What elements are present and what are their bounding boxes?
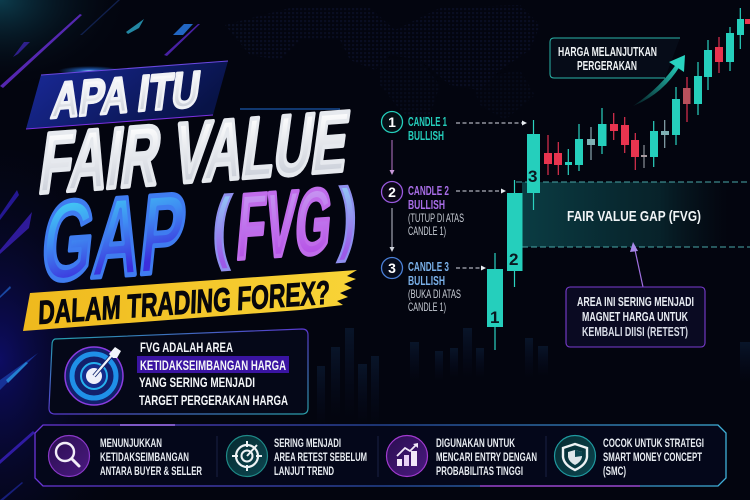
step 1: CANDLE 1 — [408, 115, 447, 129]
benefit 3 text: MENCARI ENTRY DENGAN — [436, 450, 537, 464]
fvg band — [516, 182, 750, 247]
candle numbers — [490, 167, 537, 327]
candle numbers: 3 — [528, 167, 537, 186]
title: fair value: FAIR VALUE — [34, 93, 355, 212]
benefit 1 text: KETIDAKSEIMBANGAN — [100, 450, 189, 464]
title: apa itu: APA ITU — [49, 60, 204, 129]
step 3: (BUKA DI ATAS — [408, 287, 461, 301]
world map dot texture — [225, 5, 540, 130]
step 2: BULLISH — [408, 198, 445, 212]
step 3: BULLISH — [408, 274, 445, 288]
title: dalam trading forex — [23, 270, 357, 332]
candle numbers: 2 — [509, 250, 518, 269]
definition text: TARGET PERGERAKAN HARGA — [139, 392, 288, 408]
step 3: CANDLE 1) — [408, 300, 446, 314]
decorative streaks — [0, 0, 200, 500]
icon: crosshair target — [226, 436, 268, 476]
icon: target with arrow — [65, 347, 123, 405]
fvg label: FAIR VALUE GAP (FVG) — [567, 208, 701, 225]
panel: definition — [49, 329, 308, 414]
callout: retest: MAGNET HARGA UNTUK — [582, 310, 688, 324]
definition text: FVG ADALAH AREA — [140, 339, 233, 355]
candle numbers: 1 — [490, 308, 499, 327]
arrow: step 1 to 2 — [390, 140, 394, 175]
callout: price continues: HARGA MELANJUTKAN — [558, 45, 657, 59]
icon: magnifier — [48, 436, 90, 476]
faint background bars — [317, 328, 750, 426]
benefit 4 text: (SMC) — [603, 464, 626, 478]
candlestick chart — [487, 8, 750, 350]
arrow: trend continuation — [633, 55, 685, 106]
benefit 1 text — [100, 436, 202, 478]
step 1 — [382, 112, 527, 143]
benefit 1 text: ANTARA BUYER & SELLER — [100, 464, 202, 478]
title: gap (fvg): ) — [337, 171, 359, 262]
icon: shield — [554, 436, 596, 476]
callout: retest: AREA INI SERING MENJADI — [577, 295, 694, 309]
definition text: KETIDAKSEIMBANGAN HARGA — [140, 357, 286, 373]
callout: retest: KEMBALI DIISI (RETEST) — [582, 325, 688, 339]
title: gap (fvg): GAP — [36, 169, 191, 305]
step 2 — [382, 182, 506, 238]
benefit 3 text — [436, 436, 537, 478]
step 2: (TUTUP DI ATAS — [408, 211, 464, 225]
benefit 4 text — [603, 436, 704, 478]
step 3 — [382, 258, 486, 314]
panel: benefits bar — [35, 425, 726, 486]
definition text — [137, 339, 289, 408]
benefit 1 text: MENUNJUKKAN — [100, 436, 162, 450]
callout: price continues: PERGERAKAN — [577, 59, 637, 73]
callout: price continues — [550, 38, 680, 78]
icon: growth chart — [386, 436, 428, 476]
step 3: CANDLE 3 — [408, 260, 449, 274]
benefit 3 text: DIGUNAKAN UNTUK — [436, 436, 515, 450]
callout: retest — [566, 287, 705, 347]
step 1: 1 — [388, 114, 396, 130]
step 3: 3 — [388, 260, 396, 276]
definition text: YANG SERING MENJADI — [139, 374, 255, 390]
benefit 2 text: SERING MENJADI — [274, 436, 341, 450]
title: gap (fvg): ( — [211, 180, 233, 271]
title: dalam trading forex: DALAM TRADING FOREX? — [38, 275, 330, 332]
step 2: CANDLE 2 — [408, 184, 449, 198]
step 2: CANDLE 1) — [408, 224, 446, 238]
benefit 3 text: PROBABILITAS TINGGI — [436, 464, 523, 478]
title: gap (fvg): FVG — [233, 168, 336, 279]
benefit 2 text: AREA RETEST SEBELUM — [274, 450, 367, 464]
step 2: 2 — [388, 184, 396, 200]
arrow: step 2 to 3 — [390, 208, 394, 252]
benefit 2 text: LANJUT TREND — [274, 464, 334, 478]
step 1: BULLISH — [408, 129, 444, 143]
benefit 2 text — [274, 436, 367, 478]
arrow: to fvg zone — [630, 242, 643, 287]
